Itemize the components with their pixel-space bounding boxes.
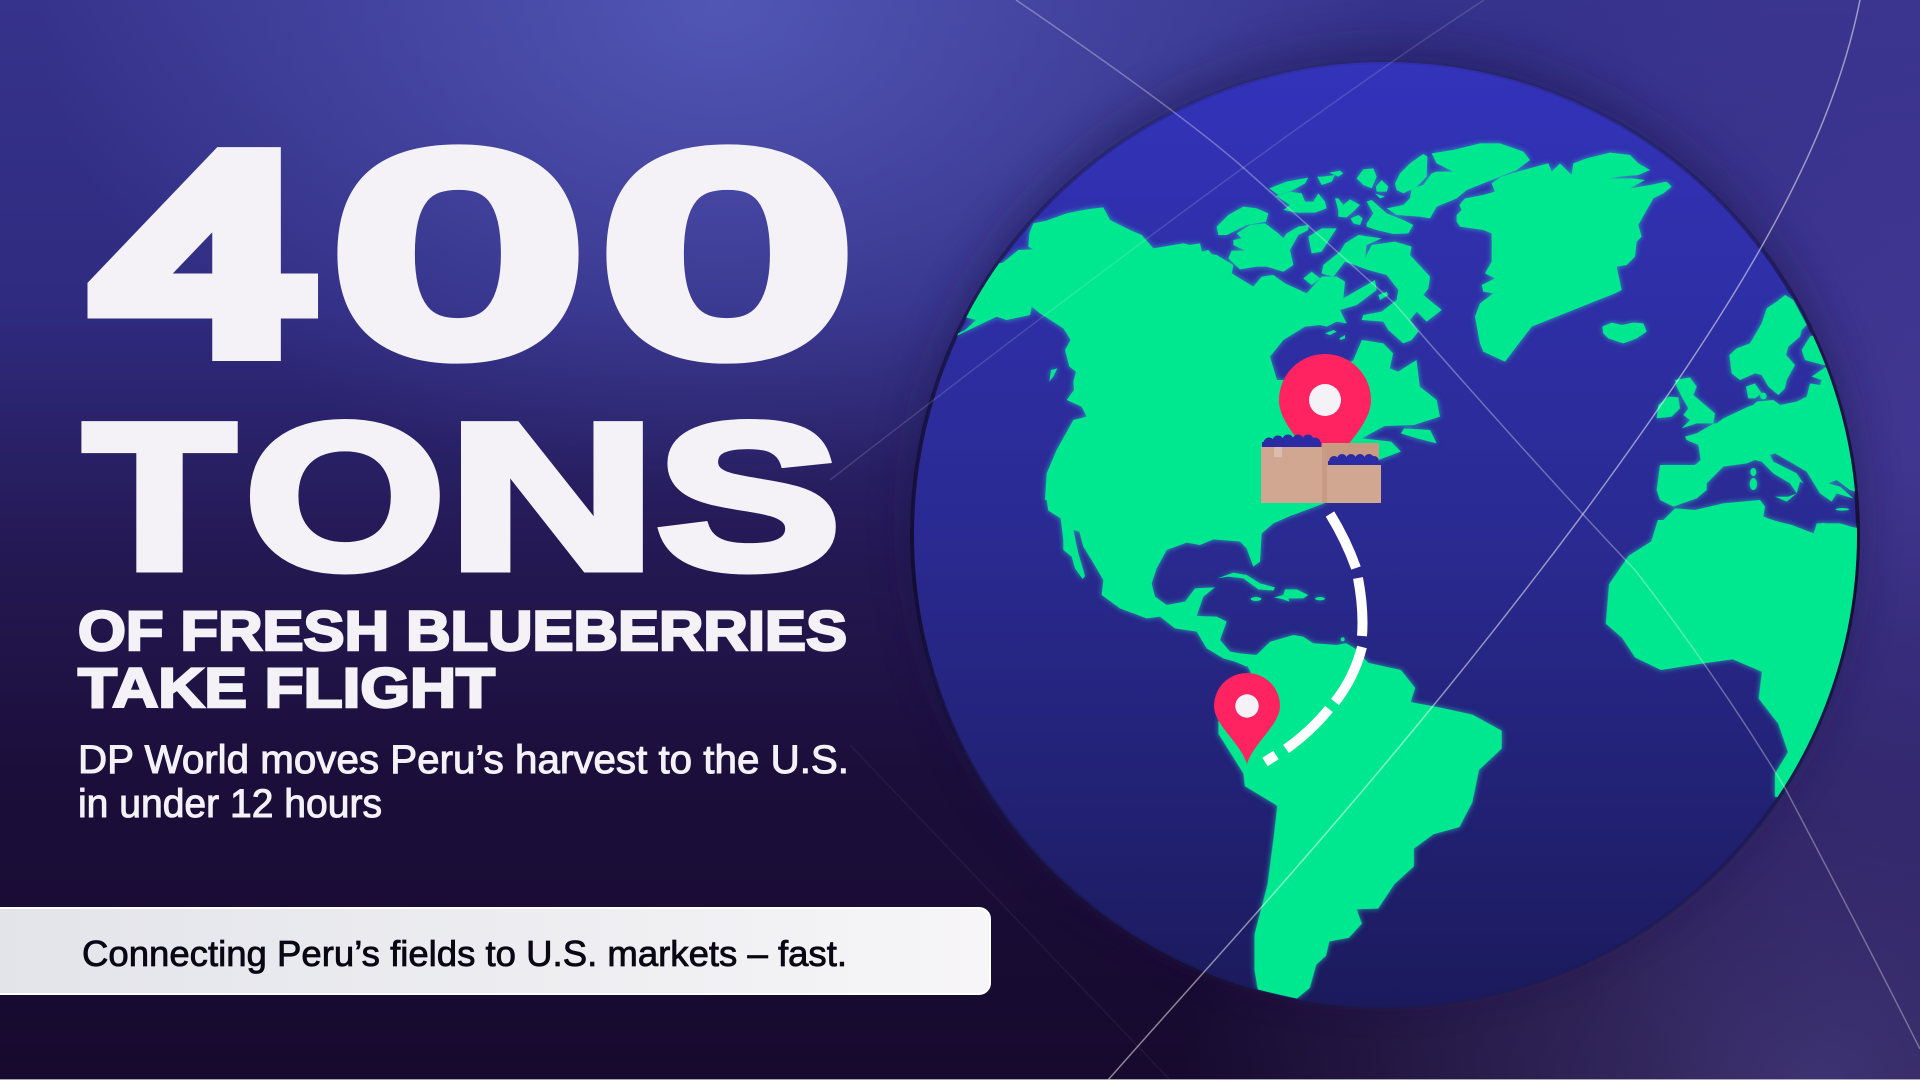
- arc line: long right curve: [1108, 0, 1860, 1080]
- title: TONS: [84, 381, 841, 612]
- route: dashed flight path: [1265, 514, 1362, 762]
- title: TONS: N: [448, 381, 656, 612]
- description line 1: DP World moves Peru’s harvest to the U.S.: [78, 738, 849, 782]
- left box: [1261, 447, 1322, 503]
- title: 400: 4: [97, 101, 311, 406]
- icon: blueberry boxes: [1261, 434, 1381, 503]
- Mexico, Central America and Caribbean: [1047, 500, 1345, 667]
- arc line: faint lower left: [850, 745, 1170, 1080]
- South America and Africa: [1219, 520, 1876, 999]
- description line 2: in under 12 hours: [78, 782, 382, 826]
- globe ocean: [912, 62, 1858, 1008]
- title: 400: 0: [610, 101, 844, 406]
- right box: [1327, 465, 1381, 503]
- subtitle line 2: TAKE FLIGHT: [78, 656, 495, 719]
- arc line: upper left to right: [1016, 0, 1920, 1049]
- title: 400: [97, 101, 844, 406]
- box side strip: [1322, 447, 1327, 503]
- Europe: [1652, 295, 1873, 540]
- land masses: [955, 143, 1876, 999]
- title: TONS: T: [84, 381, 235, 612]
- globe: [912, 62, 1876, 1008]
- berries left box: [1262, 434, 1321, 448]
- icon: lower map pin Peru: [1214, 673, 1280, 764]
- subtitle line 1: OF FRESH BLUEBERRIES: [78, 599, 847, 662]
- title: 400: 0: [341, 101, 575, 406]
- icon: upper map pin U.S.: [1279, 354, 1371, 482]
- arc line: faint upper curve: [830, 0, 1484, 480]
- eastern Canada: [1348, 336, 1443, 463]
- central United States: [1240, 380, 1325, 515]
- callout bar: [0, 908, 990, 994]
- title: TONS: S: [657, 381, 841, 612]
- globe shadow: [907, 42, 1863, 998]
- Alaska and western North America: [955, 207, 1250, 500]
- berries right box: [1328, 454, 1380, 466]
- callout text: Connecting Peru’s fields to U.S. markets – fast.: [82, 933, 847, 974]
- arctic Canada and Greenland: [1190, 143, 1672, 390]
- back box: [1322, 443, 1379, 503]
- box tape: [1274, 447, 1282, 457]
- title: TONS: O: [245, 381, 445, 612]
